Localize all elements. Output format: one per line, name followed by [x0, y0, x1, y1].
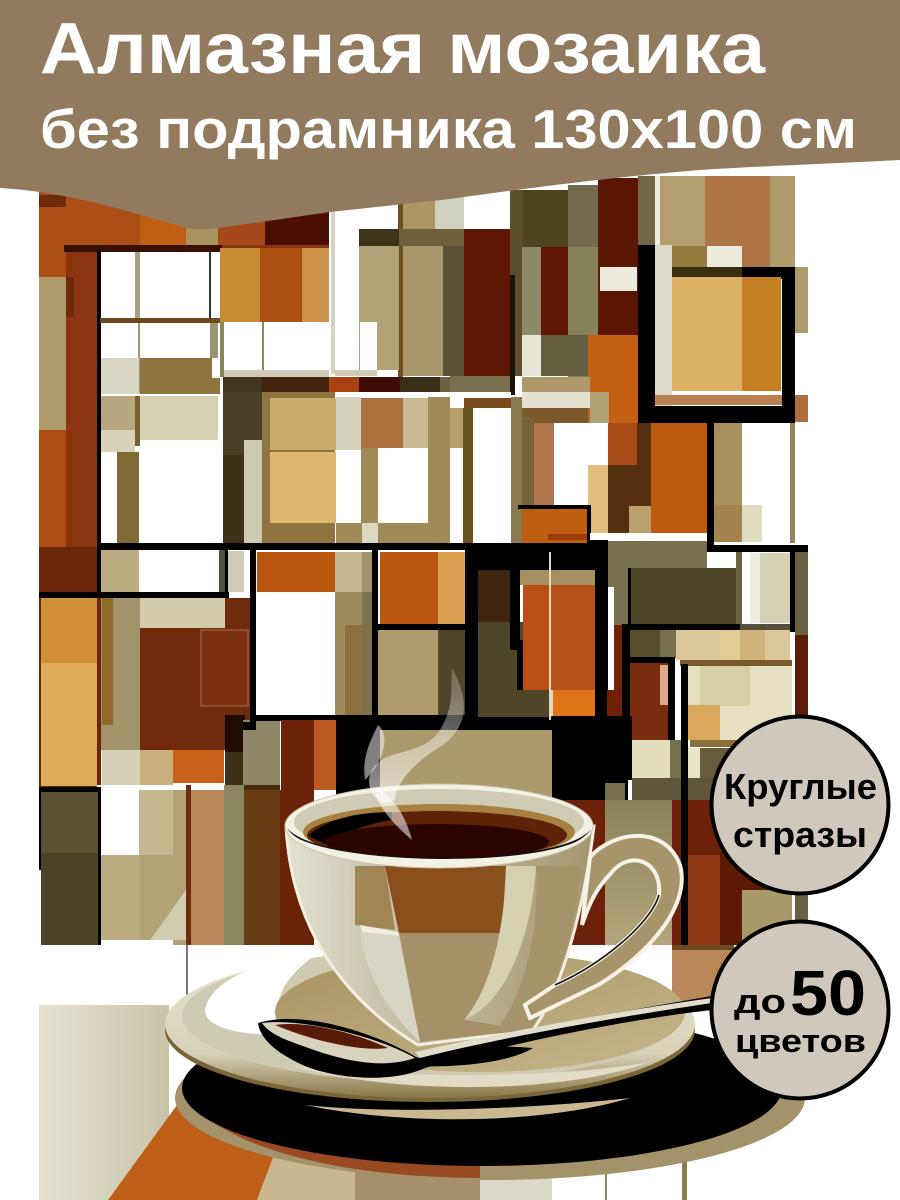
badge: round rhinestones: Круглые — [724, 766, 877, 807]
abstract mosaic painting — [39, 176, 808, 946]
cup rim and coffee — [285, 784, 593, 868]
subtitle: без подрамника 130х100 см — [40, 98, 857, 160]
badge: up to 50 colours: 50 — [790, 957, 866, 1029]
cup handle — [525, 836, 682, 1018]
steam — [364, 668, 464, 840]
round table with black top — [175, 1010, 805, 1180]
badge: up to 50 colours: до — [734, 983, 786, 1021]
badge: round rhinestones: стразы — [733, 814, 867, 855]
cup body — [286, 826, 594, 1045]
badge: up to 50 colours: цветов — [735, 1023, 866, 1059]
banner — [0, 0, 900, 229]
table area and floor below the painting — [39, 945, 734, 1200]
badge: up to 50 colours — [712, 922, 888, 1098]
badge: round rhinestones — [712, 716, 888, 894]
saucer — [165, 950, 695, 1119]
spoon — [258, 996, 712, 1078]
title: Алмазная мозаика — [40, 9, 766, 89]
coffee cup — [285, 668, 682, 1045]
